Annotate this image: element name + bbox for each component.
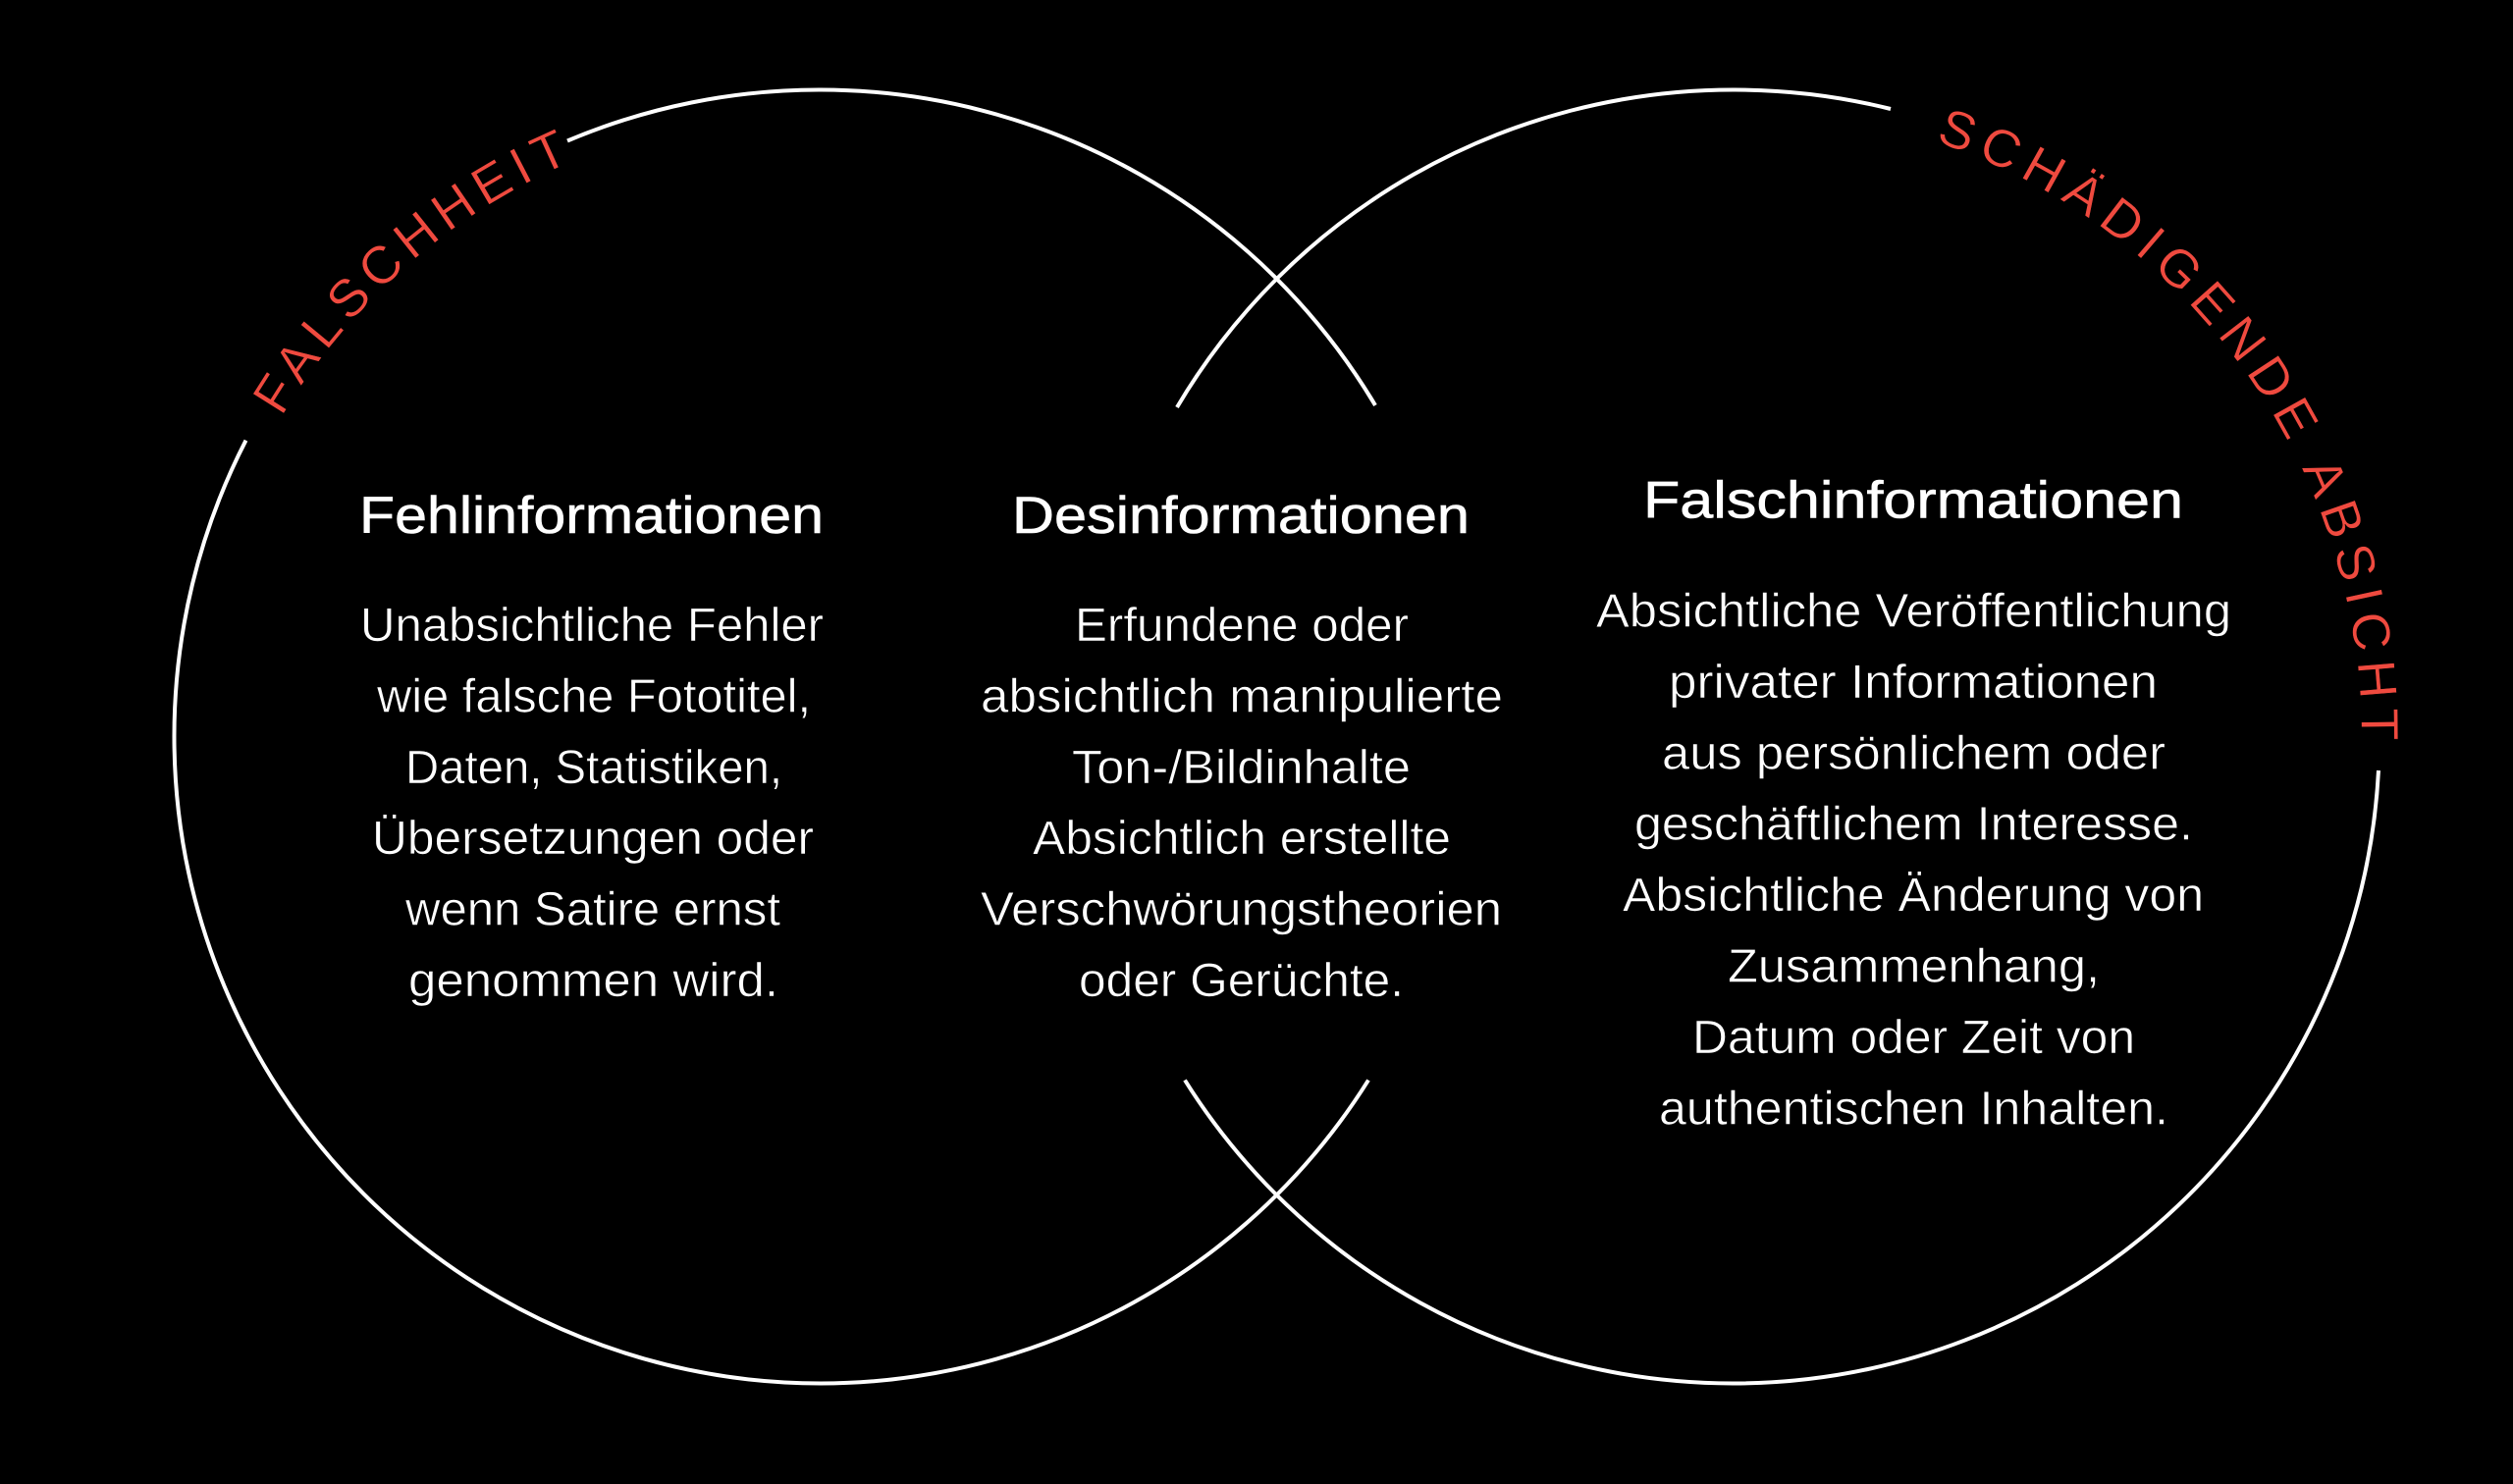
text block: Falschinformationen description: Absichtliche Änderung von xyxy=(1623,870,2204,922)
text block: Falschinformationen description: geschäftlichem Interesse. xyxy=(1634,799,2193,851)
heading: Desinformationen: Desinformationen xyxy=(1012,487,1470,545)
left circle: Falschheit xyxy=(174,89,1375,1383)
text block: Desinformationen description: Absichtlich erstellte xyxy=(1033,813,1451,865)
text block: Desinformationen description: absichtlich manipulierte xyxy=(981,670,1503,722)
text block: Fehlinformationen description: wie falsche Fototitel, xyxy=(376,670,811,722)
text block: Fehlinformationen description: genommen wird. xyxy=(408,955,778,1007)
text block: Fehlinformationen description: Daten, Statistiken, xyxy=(405,742,782,794)
heading: Fehlinformationen: Fehlinformationen xyxy=(359,487,824,545)
panel: Desinformationen xyxy=(981,487,1503,1007)
text block: Falschinformationen description: Datum oder Zeit von xyxy=(1692,1012,2135,1064)
text block: Falschinformationen description: aus persönlichem oder xyxy=(1662,727,2165,779)
panel: Falschinformationen xyxy=(1596,471,2231,1135)
text block: Desinformationen description: Erfundene oder xyxy=(1075,600,1409,652)
panel: Fehlinformationen xyxy=(359,487,824,1007)
text block: Desinformationen description: Verschwörungstheorien xyxy=(981,884,1502,936)
text block: Desinformationen description: oder Gerüchte. xyxy=(1079,955,1404,1007)
text block: Falschinformationen description xyxy=(1596,585,2231,1135)
curved label: Falschheit: FALSCHHEIT xyxy=(253,130,559,413)
heading: Falschinformationen: Falschinformationen xyxy=(1643,471,2183,530)
text block: Falschinformationen description: privater Informationen xyxy=(1669,657,2158,709)
text block: Desinformationen description xyxy=(981,600,1503,1007)
text block: Fehlinformationen description: wenn Satire ernst xyxy=(404,884,780,936)
text block: Falschinformationen description: Zusammenhang, xyxy=(1728,940,2100,993)
text block: Fehlinformationen description xyxy=(360,600,824,1007)
curved label: schädigende Absicht: SCHÄDIGENDE ABSICHT xyxy=(1940,111,2398,740)
right circle: schädigende Absicht xyxy=(1177,89,2379,1384)
text block: Desinformationen description: Ton-/Bildinhalte xyxy=(1072,742,1411,794)
text block: Falschinformationen description: authentischen Inhalten. xyxy=(1659,1083,2168,1135)
text block: Falschinformationen description: Absichtliche Veröffentlichung xyxy=(1596,585,2231,638)
text block: Fehlinformationen description: Unabsichtliche Fehler xyxy=(360,600,824,652)
text block: Fehlinformationen description: Übersetzungen oder xyxy=(372,813,814,865)
